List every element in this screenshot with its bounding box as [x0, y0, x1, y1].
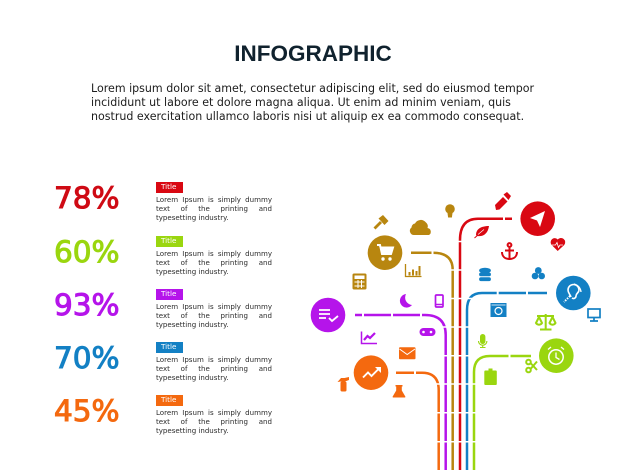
- stat row: 45% orange: Title: [161, 395, 176, 404]
- icon: microphone: [478, 334, 487, 348]
- stat row: 93% purple: 93%: [54, 288, 120, 322]
- stat row: 70% blue: Title: [161, 342, 176, 351]
- icon: phone: [436, 295, 443, 307]
- node: checklist: [311, 298, 345, 332]
- icon: bar chart: [406, 264, 422, 276]
- icon: game controller: [420, 328, 436, 336]
- intro text block: [91, 82, 534, 122]
- stat row: 45% orange: [54, 394, 272, 434]
- stat row: 70% blue: [54, 341, 272, 382]
- icon: dropper: [495, 192, 511, 210]
- stat row: 45% orange: 45%: [54, 394, 120, 428]
- stat row: 93% purple: Title: [161, 289, 176, 298]
- icon: fire extinguisher: [338, 377, 349, 392]
- icon: calculator: [352, 274, 366, 290]
- icon: cubes: [532, 267, 545, 279]
- icon: clipboard: [484, 368, 497, 385]
- intro text block: Lorem ipsum dolor sit amet, consectetur adipiscing elit, sed do eiusmod tempor: [91, 82, 534, 94]
- icon: camera window: [490, 303, 506, 317]
- icon: heart: [551, 238, 565, 251]
- icon: moon: [400, 294, 412, 308]
- icon: cloud: [410, 220, 431, 235]
- intro text block: incididunt ut labore et dolore magna aliqua. Ut enim ad minim veniam, quis: [91, 96, 511, 108]
- stat row: 78% red: 78%: [54, 181, 120, 215]
- node: trend arrow: [354, 355, 388, 390]
- icon: gavel: [374, 215, 388, 230]
- icon: light bulb: [445, 204, 455, 218]
- stat row: 78% red: Title: [161, 182, 176, 191]
- icon: rising chart: [362, 332, 377, 344]
- stat row: 70% blue: 70%: [54, 341, 120, 375]
- branch lines: [355, 216, 547, 470]
- icon: database: [479, 268, 491, 281]
- node: alarm clock: [539, 338, 574, 373]
- icon: mail: [399, 347, 416, 359]
- stat row: 93% purple: Lorem Ipsum is simply dummy text of the printing and typesetting industry.: [156, 302, 272, 328]
- stat row: 60% green: [54, 235, 272, 276]
- stat row: 60% green: 60%: [54, 235, 120, 269]
- icon: monitor: [588, 309, 600, 321]
- stat row: 60% green: Lorem Ipsum is simply dummy text of the printing and typesetting industry.: [156, 249, 272, 276]
- icon: leaf: [474, 226, 489, 238]
- node: hearing: [556, 276, 591, 310]
- stat row: 78% red: [54, 181, 272, 222]
- title: INFOGRAPHIC: [234, 41, 392, 66]
- icon: anchor: [502, 243, 517, 259]
- stat row: 70% blue: Lorem Ipsum is simply dummy text of the printing and typesetting industry.: [156, 355, 272, 382]
- intro text block: nostrud exercitation ullamco laboris nisi ut aliquip ex ea commodo consequat.: [91, 110, 524, 122]
- icon: scales: [536, 314, 556, 330]
- stat row: 78% red: Lorem Ipsum is simply dummy text of the printing and typesetting industry.: [156, 195, 272, 222]
- stat row: 60% green: Title: [161, 236, 176, 245]
- node: cart: [368, 235, 402, 270]
- stat row: 45% orange: Lorem Ipsum is simply dummy text of the printing and typesetting industry.: [156, 408, 272, 434]
- stat row: 93% purple: [54, 288, 272, 328]
- node: navigation arrow: [520, 201, 555, 236]
- icon: flask: [393, 385, 405, 398]
- icon: scissors: [526, 360, 537, 372]
